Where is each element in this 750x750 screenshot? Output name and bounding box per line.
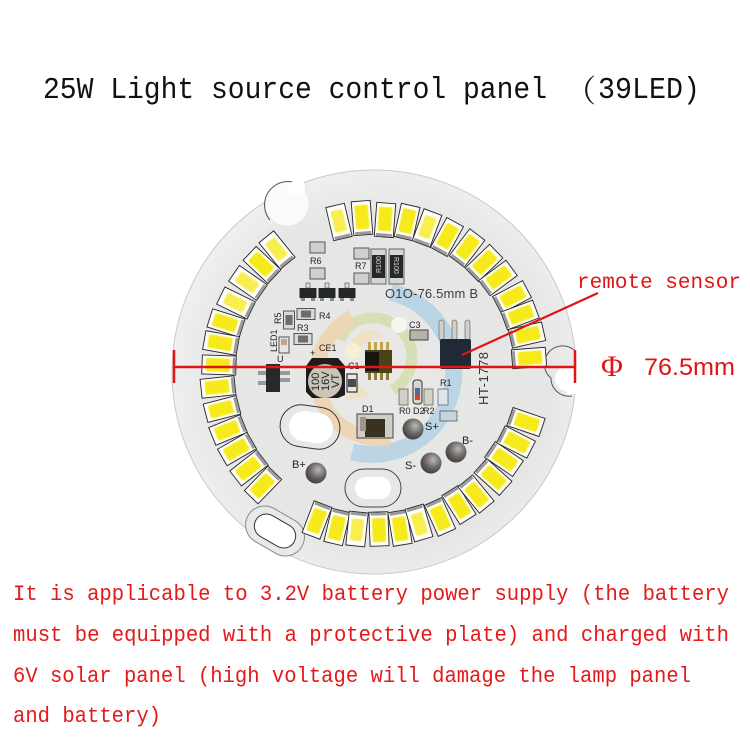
solder pads with labels: S+ (425, 421, 439, 433)
main IC (365, 342, 392, 380)
remote sensor label: remote sensor (577, 272, 741, 295)
solder pads R6 and R7: R6 (310, 256, 322, 266)
electrolytic capacitor: CE1 (319, 343, 337, 353)
small resistors R3 R4 R5 and LED1: R4 (319, 311, 331, 321)
board disc (172, 170, 576, 574)
LEDs: bottom arc, 13 LEDs (302, 408, 545, 547)
small capacitor C1: C1 (348, 361, 360, 371)
chip U1 (258, 364, 290, 392)
electrolytic capacitor (306, 343, 345, 398)
solder pads with labels: B- (462, 435, 473, 447)
electrolytic capacitor: + (310, 348, 315, 358)
diameter label (601, 350, 735, 383)
large oval hole (277, 402, 343, 452)
panel: circular LED circuit board (172, 170, 583, 574)
capacitor C3 and small parts: R2 (423, 406, 435, 416)
solder pads with labels: B+ (292, 459, 306, 471)
center oval hole (345, 469, 401, 507)
small resistors R3 R4 R5 and LED1 (269, 308, 331, 364)
solder pads R6 and R7 (310, 242, 369, 284)
small capacitor C1 (347, 361, 360, 392)
electrolytic capacitor: 16V (320, 371, 332, 391)
solder pads with labels: S- (405, 460, 416, 472)
small resistors R3 R4 R5 and LED1: R3 (297, 323, 309, 333)
title: （ (565, 74, 596, 109)
logo watermark (317, 292, 454, 454)
remote sensor component (439, 320, 471, 369)
small resistors R3 R4 R5 and LED1: LED1 (269, 329, 279, 352)
electrolytic capacitor: VT (330, 374, 342, 388)
sensor leader line (462, 293, 598, 355)
diode D1 (357, 404, 393, 438)
electrolytic capacitor: 100 (310, 373, 322, 391)
R100 resistors (371, 249, 404, 284)
red description text (13, 582, 729, 729)
transistors (300, 283, 356, 301)
title: 39LED) (598, 73, 700, 108)
board print: model text: O1O-76.5mm B (385, 286, 478, 301)
capacitor C3 and small parts (399, 320, 457, 421)
diameter dimension line (174, 350, 575, 383)
red description text: and battery) (13, 704, 161, 729)
diode D1: D1 (362, 404, 374, 414)
R100 resistors: R100 (376, 256, 383, 273)
small resistors R3 R4 R5 and LED1: U (277, 354, 284, 364)
LEDs: top right arc, 13 LEDs (326, 200, 547, 369)
LEDs: left arc, 13 LEDs (200, 231, 295, 504)
R100 resistors: R100 (392, 257, 399, 274)
mounting slot bottom left (239, 499, 311, 563)
title: 25W Light source control panel (43, 73, 547, 108)
diameter label: Φ (601, 350, 623, 383)
board print: HT-1778: HT-1778 (476, 352, 491, 405)
red description text: 6V solar panel (high voltage will damage the lamp panel (13, 664, 691, 689)
solder pads R6 and R7: R7 (355, 261, 367, 271)
mounting notch right (544, 346, 583, 396)
capacitor C3 and small parts: D2 (413, 406, 425, 416)
capacitor C3 and small parts: C3 (409, 320, 421, 330)
mounting notch top left (265, 172, 308, 226)
capacitor C3 and small parts: R1 (440, 378, 452, 388)
small resistors R3 R4 R5 and LED1: R5 (273, 312, 283, 324)
solder pads with labels (292, 418, 473, 484)
capacitor C3 and small parts: R0 (399, 406, 411, 416)
diameter label: 76.5mm (644, 354, 735, 381)
